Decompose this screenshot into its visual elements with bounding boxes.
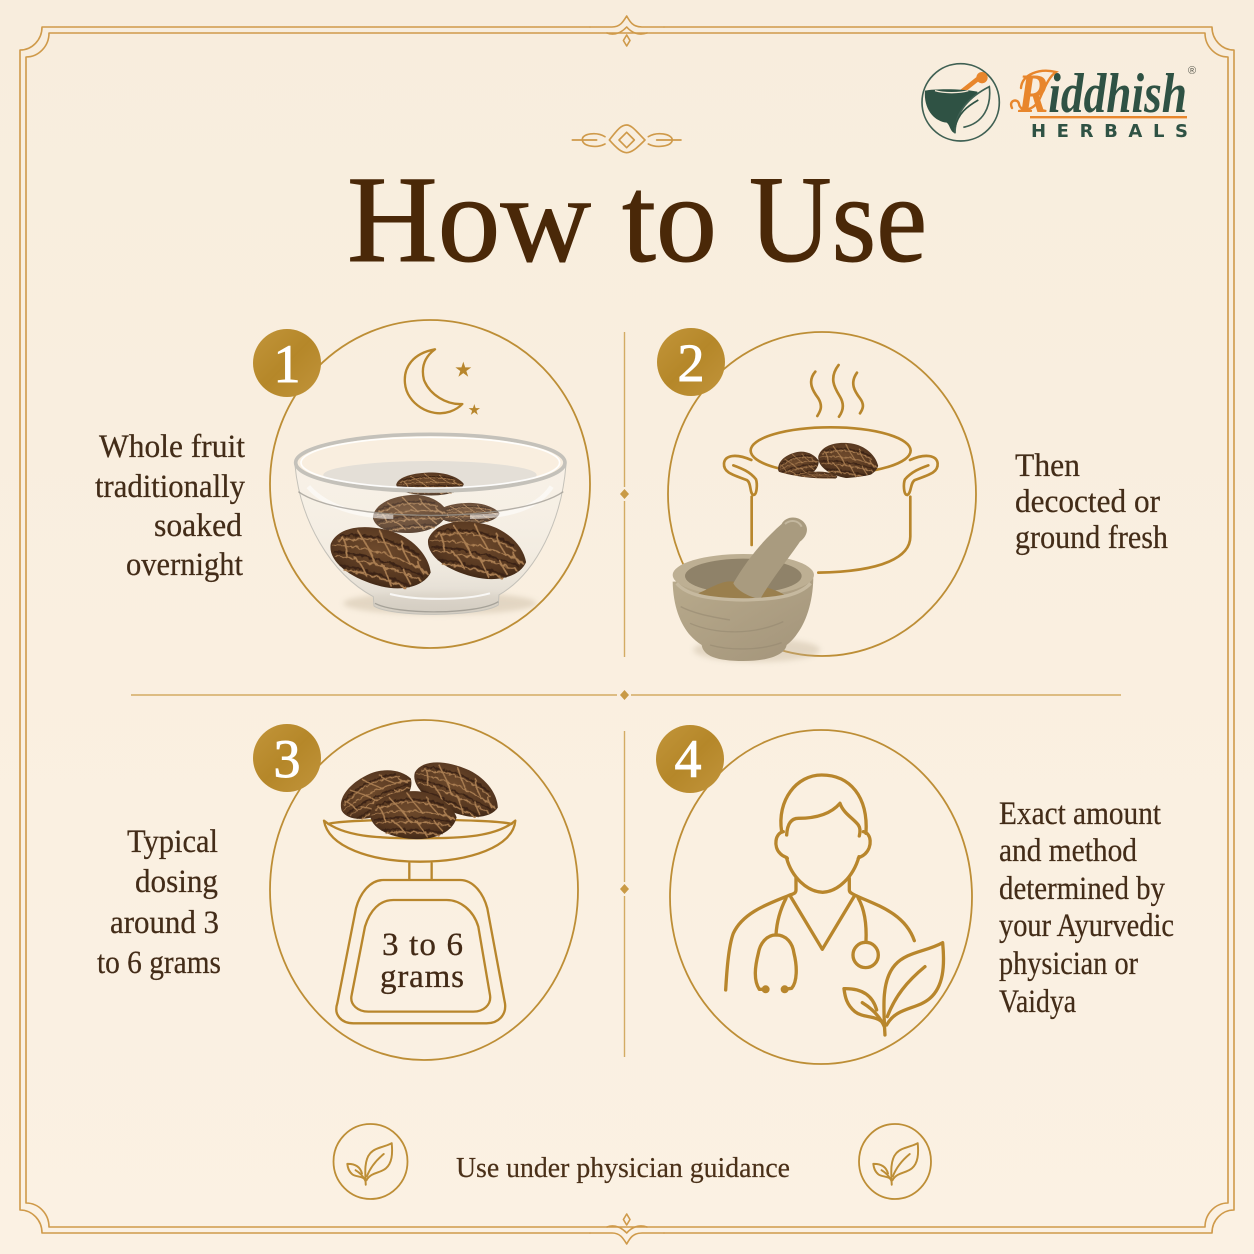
- panel: step 2 decoct or grind: [657, 328, 1168, 662]
- step 3 badge: [253, 724, 321, 792]
- step 3 text: around 3: [110, 905, 219, 941]
- logo underline: [1030, 116, 1187, 118]
- logo wordmark: Riddhish: [1017, 63, 1187, 125]
- logo emblem: [922, 64, 999, 141]
- step 2 badge: 2: [678, 333, 704, 393]
- step 1 text: traditionally: [95, 469, 245, 505]
- step 4 text: your Ayurvedic: [999, 908, 1174, 944]
- step 3 badge: 3: [274, 729, 300, 789]
- title: to: [622, 151, 717, 288]
- step 4 text: and method: [999, 833, 1137, 869]
- step 2 badge: [657, 328, 725, 396]
- icon: moon and stars: [405, 349, 480, 415]
- dividers: [131, 332, 1121, 1057]
- illustration: glass bowl with soaking fruit: [295, 434, 566, 615]
- step 4 badge: 4: [674, 729, 702, 789]
- step 1 badge: 1: [274, 334, 300, 394]
- icon: footer leaf right: [859, 1124, 931, 1199]
- panel: step 1 soak overnight: [95, 320, 590, 648]
- icon: footer leaf left: [334, 1124, 408, 1199]
- icon: leaf sprig: [844, 943, 944, 1035]
- step 2 circle: [668, 332, 976, 656]
- panel: step 4 physician: [656, 725, 1174, 1064]
- step 2 text: decocted or: [1015, 484, 1160, 520]
- step 4 circle: [670, 730, 972, 1064]
- footer note: Use under physician guidance: [456, 1152, 790, 1184]
- title: [347, 151, 927, 288]
- scale reading: [380, 927, 464, 995]
- footer: [334, 1124, 931, 1199]
- step 3 text: [97, 824, 221, 981]
- step 1 text: [95, 429, 245, 583]
- title: How: [347, 151, 591, 288]
- step 1 text: Whole fruit: [99, 429, 245, 465]
- icon: steaming pot: [724, 365, 938, 573]
- step 1 badge: [253, 329, 321, 397]
- logo swash: [1011, 71, 1056, 109]
- icon: doctor with stethoscope: [726, 775, 914, 992]
- step 4 text: determined by: [999, 871, 1165, 907]
- step 2 text: ground fresh: [1015, 520, 1168, 556]
- panel: step 3 dosing: [97, 720, 578, 1060]
- title: Use: [749, 151, 927, 288]
- registered mark: ®: [1188, 65, 1196, 77]
- step 4 text: Vaidya: [999, 984, 1076, 1020]
- scale reading: grams: [380, 959, 464, 995]
- illustration: fruit on scale pan: [333, 750, 507, 841]
- step 3 text: dosing: [135, 864, 218, 900]
- step 1 circle: [270, 320, 590, 648]
- step 4 text: physician or: [999, 946, 1138, 982]
- step 3 circle: [270, 720, 578, 1060]
- scale reading: 3 to 6: [382, 927, 463, 963]
- step 3 text: Typical: [127, 824, 218, 860]
- illustration: stone mortar and pestle: [673, 517, 820, 662]
- logo subtitle: HERBALS: [1031, 121, 1188, 142]
- title ornament: [572, 125, 681, 153]
- icon: kitchen scale: [324, 820, 515, 1023]
- logo: Riddhish Herbals: [922, 63, 1196, 142]
- step 1 text: soaked: [154, 508, 242, 544]
- step 2 text: [1015, 448, 1168, 556]
- step 2 text: Then: [1015, 448, 1080, 484]
- step 3 text: to 6 grams: [97, 945, 221, 981]
- step 4 text: [999, 796, 1174, 1020]
- step 4 text: Exact amount: [999, 796, 1161, 832]
- step 4 badge: [656, 725, 724, 793]
- step 1 text: overnight: [126, 547, 243, 583]
